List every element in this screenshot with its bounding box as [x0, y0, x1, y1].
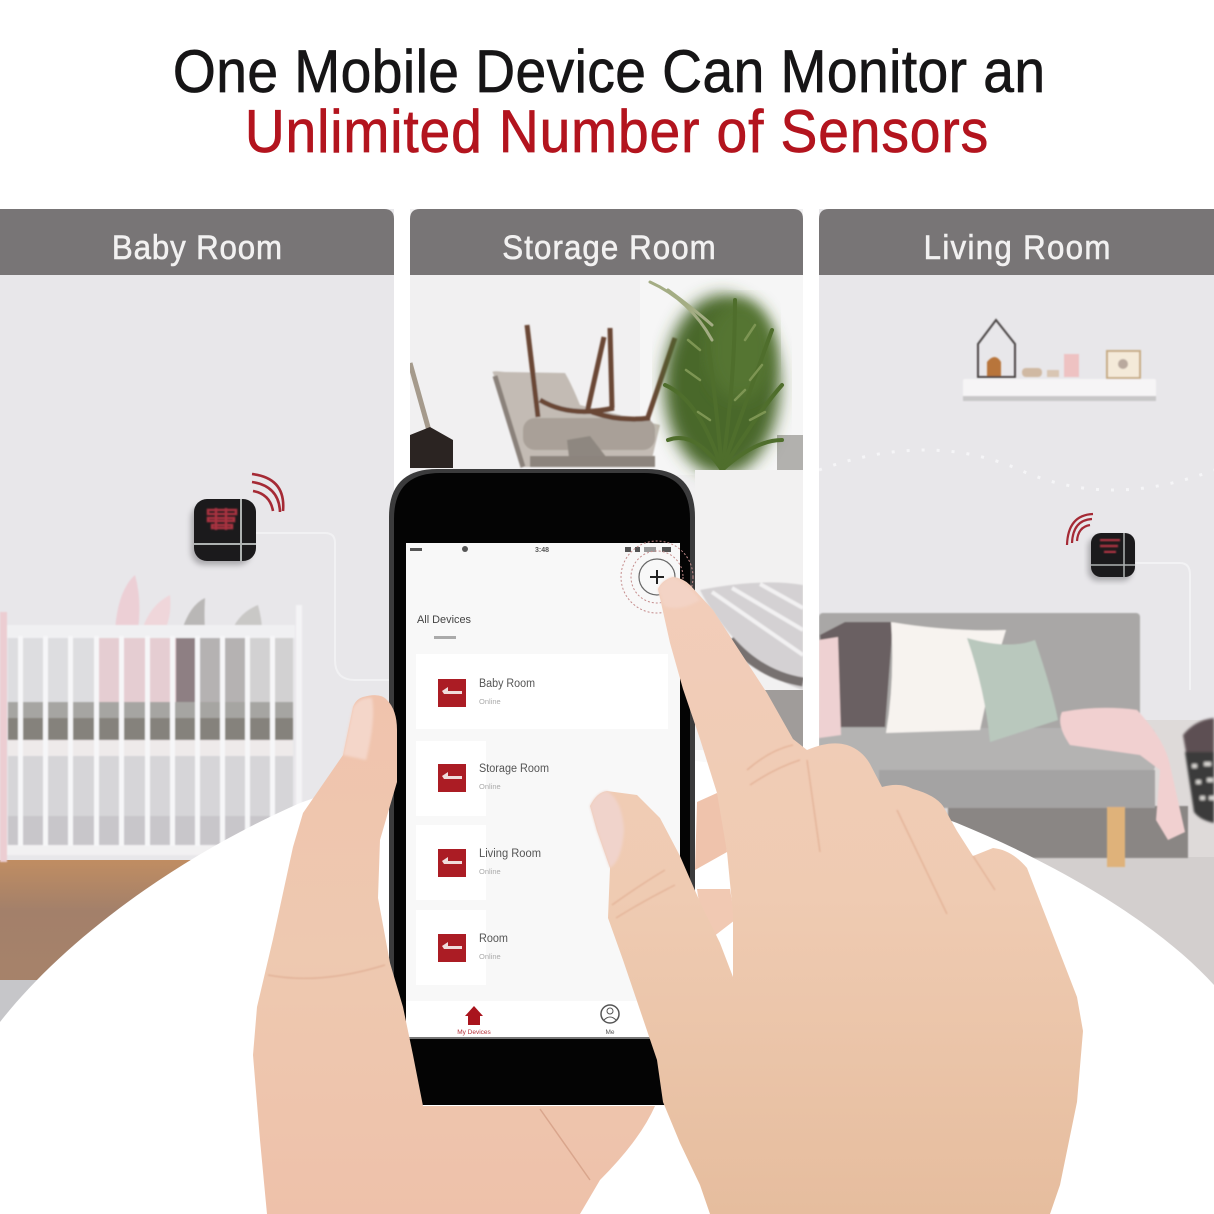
- title: Unlimited Number of Sensors: [245, 99, 988, 166]
- wire: [256, 533, 394, 680]
- wire: [1130, 563, 1190, 690]
- status bar: [410, 546, 671, 554]
- device row: living room: Living Room: [479, 848, 541, 860]
- wall below: [695, 470, 760, 488]
- device row: room: Online: [479, 952, 501, 961]
- device row: baby room: [416, 654, 668, 729]
- header: baby room: [0, 209, 394, 275]
- string lights: [819, 450, 1214, 490]
- floor: [944, 720, 1214, 985]
- header: living room: [819, 209, 1214, 275]
- panel: baby room: [0, 209, 394, 1030]
- tab bar: [406, 1001, 680, 1038]
- icon: wireless arcs: [1067, 514, 1093, 545]
- add button ripple: [621, 541, 693, 613]
- device row: storage room: [416, 741, 549, 816]
- header: living room: Living Room: [924, 228, 1110, 266]
- device row: living room: Online: [479, 867, 501, 876]
- icon: wireless arcs: [252, 474, 283, 512]
- tab bar: Me: [605, 1029, 615, 1036]
- phone: [389, 469, 695, 1105]
- panel: storage room: [410, 209, 803, 750]
- white arc base: [0, 756, 1214, 1214]
- panel: living room: [819, 209, 1214, 1030]
- device row: baby room: Online: [479, 697, 501, 706]
- status bar: 3:48: [535, 547, 549, 554]
- tab bar: My Devices: [457, 1029, 492, 1036]
- device row: storage room: Online: [479, 782, 501, 791]
- title: [173, 39, 1045, 166]
- fingers behind phone: [695, 793, 735, 937]
- header: baby room: Baby Room: [112, 228, 282, 266]
- pointing hand: [590, 577, 1083, 1214]
- title: One Mobile Device Can Monitor an: [173, 39, 1045, 106]
- device row: storage room: Storage Room: [479, 763, 549, 775]
- device row: baby room: Baby Room: [479, 678, 535, 690]
- device row: room: Room: [479, 933, 508, 945]
- icon: sensor: [1067, 514, 1135, 581]
- device row: living room: [416, 825, 541, 900]
- icon: sensor: [191, 474, 283, 565]
- phone screen: [406, 541, 693, 1039]
- all devices: All Devices: [417, 614, 471, 626]
- header: storage room: [410, 209, 803, 275]
- sofa: [819, 613, 1185, 867]
- device row: room: [416, 910, 508, 985]
- header: storage room: Storage Room: [502, 228, 716, 266]
- floor: [0, 860, 191, 1022]
- icon: shelf: [963, 320, 1156, 401]
- chair: [492, 325, 675, 467]
- icon: crib: [0, 575, 302, 862]
- guitar: [410, 363, 453, 468]
- basket: [1183, 718, 1214, 823]
- plant: [650, 282, 782, 475]
- holding hand: [253, 695, 655, 1214]
- pillow: [700, 582, 803, 690]
